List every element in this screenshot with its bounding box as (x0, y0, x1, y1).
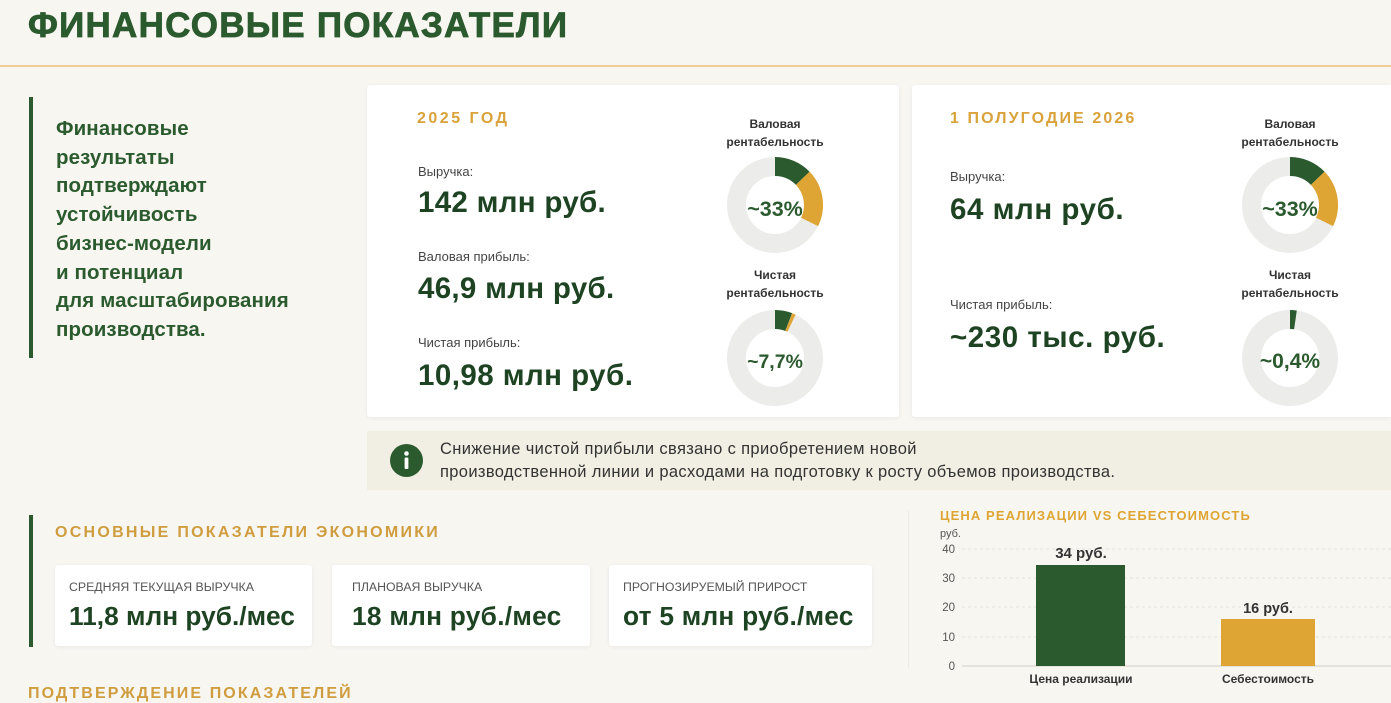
metric: revenue 2026 (950, 169, 1124, 226)
bar chart: price vs cost: 20 (942, 602, 955, 614)
header rule (0, 65, 1391, 67)
panel: first half 2026 (912, 85, 1391, 417)
donut label: net margin 2026: рентабельность (1241, 286, 1339, 300)
card: forecast growth (609, 565, 872, 646)
donut: gross margin 2026 (1242, 157, 1338, 253)
metric: revenue 2026: 64 млн руб. (950, 193, 1124, 226)
card: forecast growth: от 5 млн руб./мес (623, 601, 854, 631)
bar chart: price vs cost: 10 (942, 632, 955, 644)
donut label: net margin 2025: рентабельность (726, 286, 824, 300)
card: current revenue (55, 565, 312, 646)
metric: net profit 2025: Чистая прибыль: (418, 335, 520, 350)
metric: net profit 2026: Чистая прибыль: (950, 297, 1052, 312)
card: planned revenue: 18 млн руб./мес (352, 601, 562, 631)
metric: gross profit 2025: 46,9 млн руб. (418, 272, 615, 305)
bar chart: price vs cost: 16 руб. (1243, 601, 1293, 617)
panel heading: first half 2026: 1 ПОЛУГОДИЕ 2026 (950, 110, 1136, 126)
donut label: net margin 2025 (726, 268, 824, 300)
card: current revenue: 11,8 млн руб./мес (69, 601, 295, 631)
metric: revenue 2026: Выручка: (950, 169, 1005, 184)
callout text: Снижение чистой прибыли связано с приобретением новой (440, 440, 917, 458)
icon: info (390, 444, 423, 477)
card: planned revenue: ПЛАНОВАЯ ВЫРУЧКА (352, 580, 482, 594)
next section heading: ПОДТВЕРЖДЕНИЕ ПОКАЗАТЕЛЕЙ (28, 685, 353, 702)
donut label: gross margin 2025 (726, 117, 824, 149)
metric: revenue 2025: 142 млн руб. (418, 186, 606, 219)
metric: net profit 2026 (950, 297, 1165, 354)
metric: revenue 2025: Выручка: (418, 164, 473, 179)
section heading: key economics: ОСНОВНЫЕ ПОКАЗАТЕЛИ ЭКОНОМИКИ (55, 524, 440, 541)
donut label: gross margin 2026 (1241, 117, 1339, 149)
donut label: net margin 2025: Чистая (754, 268, 796, 282)
bar chart: price vs cost: ЦЕНА РЕАЛИЗАЦИИ VS СЕБЕСТОИМОСТЬ (940, 508, 1251, 523)
metric: gross profit 2025 (418, 249, 615, 305)
bar chart: price vs cost: Цена реализации (1029, 672, 1133, 686)
bar chart: price vs cost: 34 руб. (1055, 545, 1107, 562)
bar: sale price (1036, 565, 1125, 666)
donut label: net margin 2026 (1241, 268, 1339, 300)
intro text block: бизнес-модели (56, 232, 212, 255)
panel: key economics (29, 515, 872, 647)
intro text block: для масштабирования (56, 289, 289, 312)
bar: cost (1221, 619, 1315, 666)
donut label: gross margin 2025: рентабельность (726, 135, 824, 149)
metric: gross profit 2025: Валовая прибыль: (418, 249, 530, 264)
bar chart: price vs cost: руб. (940, 528, 961, 540)
bar chart: price vs cost: 30 (942, 573, 955, 585)
donut: net margin 2025 (727, 310, 823, 406)
bar chart: price vs cost: 0 (949, 661, 955, 673)
metric: net profit 2025 (418, 335, 633, 392)
intro text block (29, 97, 289, 358)
donut label: gross margin 2026: Валовая (1264, 117, 1316, 131)
donut: net margin 2025: ~7,7% (747, 351, 803, 373)
card: planned revenue (332, 565, 590, 646)
title: ФИНАНСОВЫЕ ПОКАЗАТЕЛИ (28, 6, 568, 45)
intro text block: производства. (56, 318, 206, 341)
intro text block: устойчивость (56, 203, 198, 226)
donut: gross margin 2025 (727, 157, 824, 253)
callout text: производственной линии и расходами на подготовку к росту объемов производства. (440, 462, 1115, 480)
callout: net profit note (367, 431, 1391, 490)
donut: gross margin 2025: ~33% (747, 197, 803, 221)
intro text block: подтверждают (56, 174, 207, 197)
divider (908, 510, 909, 668)
metric: net profit 2025: 10,98 млн руб. (418, 359, 633, 392)
callout text (440, 440, 1115, 480)
donut: net margin 2026 (1242, 310, 1338, 406)
intro text block: результаты (56, 146, 175, 169)
donut: net margin 2026: ~0,4% (1260, 350, 1320, 373)
card: forecast growth: ПРОГНОЗИРУЕМЫЙ ПРИРОСТ (623, 580, 807, 594)
panel: 2025 (367, 85, 899, 417)
panel heading: 2025: 2025 ГОД (417, 110, 510, 126)
metric: revenue 2025 (418, 164, 606, 219)
card: current revenue: СРЕДНЯЯ ТЕКУЩАЯ ВЫРУЧКА (69, 580, 254, 594)
bar chart: price vs cost: 40 (942, 544, 955, 556)
metric: net profit 2026: ~230 тыс. руб. (950, 321, 1165, 354)
intro text block: и потенциал (56, 261, 183, 284)
donut label: gross margin 2025: Валовая (749, 117, 801, 131)
donut: gross margin 2026: ~33% (1262, 197, 1318, 221)
bar chart: price vs cost (940, 508, 1391, 686)
intro text block: Финансовые (56, 117, 189, 140)
bar chart: price vs cost: Себестоимость (1222, 672, 1314, 686)
donut label: net margin 2026: Чистая (1269, 268, 1311, 282)
donut label: gross margin 2026: рентабельность (1241, 135, 1339, 149)
